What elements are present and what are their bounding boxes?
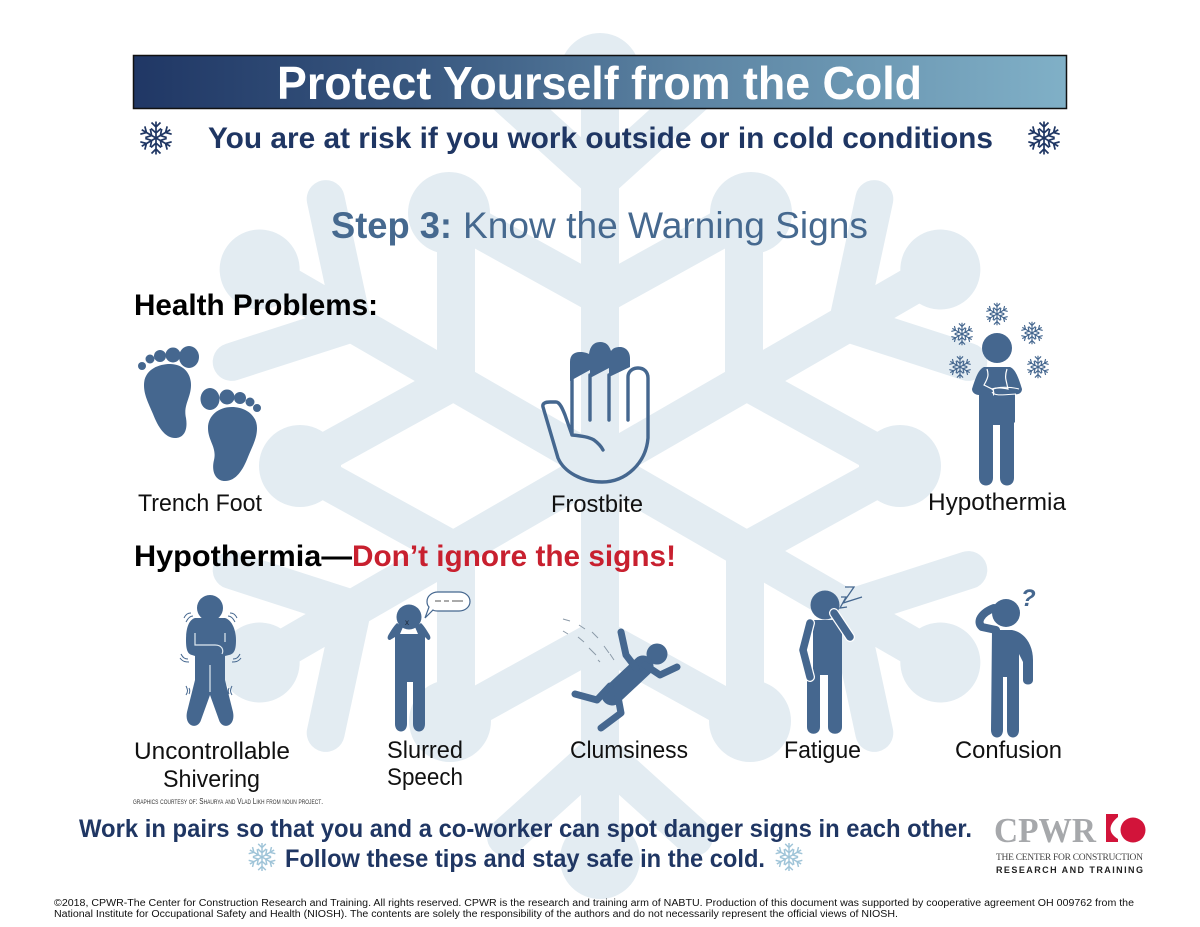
icon: confused person	[979, 585, 1036, 738]
subtitle: You are at risk if you work outside or in cold conditions	[208, 122, 993, 155]
icon: fatigued person	[803, 587, 862, 734]
label: trench foot: Trench Foot	[138, 490, 262, 517]
icon: right snowflake	[1027, 122, 1061, 154]
label: clumsiness: Clumsiness	[570, 737, 688, 764]
label: confusion: Confusion	[955, 737, 1062, 764]
icon: slurred speech person	[388, 592, 470, 732]
footer copyright: National Institute for Occupational Safety and Health (NIOSH). The contents are solely the responsibility of the authors and do not necessarily represent the official views of NIOSH.	[54, 909, 898, 920]
label: frostbite: Frostbite	[551, 491, 643, 518]
label: hypothermia: Hypothermia	[928, 489, 1067, 516]
footer copyright	[54, 898, 1134, 920]
step heading: Know the Warning Signs	[463, 205, 868, 246]
heading: hypothermia warning	[134, 540, 676, 573]
icon: hypothermia person with snowflakes	[949, 303, 1049, 486]
label: slurred speech	[387, 737, 463, 791]
label: slurred speech: Slurred	[387, 737, 463, 764]
heading: hypothermia warning: Don’t ignore the signs!	[352, 540, 676, 573]
logo: CPWR: CPWR	[994, 811, 1097, 850]
callout: work in pairs	[79, 815, 972, 873]
label: uncontrollable shivering: Uncontrollable	[134, 738, 290, 765]
logo: CPWR: THE CENTER FOR CONSTRUCTION	[996, 853, 1143, 863]
callout: work in pairs: Work in pairs so that you and a co-worker can spot danger signs in each other.	[79, 815, 972, 843]
label: uncontrollable shivering: Shivering	[163, 766, 260, 793]
icon: falling person	[563, 619, 677, 728]
heading: health problems: Health Problems:	[134, 289, 378, 322]
icon: slurred speech person: x	[405, 618, 409, 627]
step heading: Step 3:	[331, 205, 452, 246]
icon: confused person: ?	[1021, 585, 1036, 612]
background snowflake watermark	[178, 33, 1022, 899]
icon: left snowflake	[139, 122, 173, 154]
heading: hypothermia warning: Hypothermia—	[134, 540, 352, 573]
icon: shivering person	[180, 595, 241, 726]
icon: frostbitten hand	[543, 342, 648, 482]
callout: work in pairs: Follow these tips and stay safe in the cold.	[285, 845, 765, 873]
icon: feet	[138, 346, 261, 481]
logo: CPWR	[994, 811, 1146, 875]
label: uncontrollable shivering	[134, 738, 290, 793]
logo: CPWR: RESEARCH AND TRAINING	[996, 865, 1143, 875]
label: fatigue: Fatigue	[784, 737, 861, 764]
title banner	[134, 56, 1066, 109]
label: slurred speech: Speech	[387, 764, 463, 791]
title banner: Protect Yourself from the Cold	[277, 57, 922, 109]
footer copyright: ©2018, CPWR-The Center for Construction Research and Training. All rights reserved. CPWR is the research and training arm of NABTU. Production of this document was supported by cooperative agreement OH 009762 from the	[54, 898, 1134, 909]
graphics credit: graphics courtesy of: Shaurya and Vlad Likh from noun project.	[133, 797, 323, 806]
